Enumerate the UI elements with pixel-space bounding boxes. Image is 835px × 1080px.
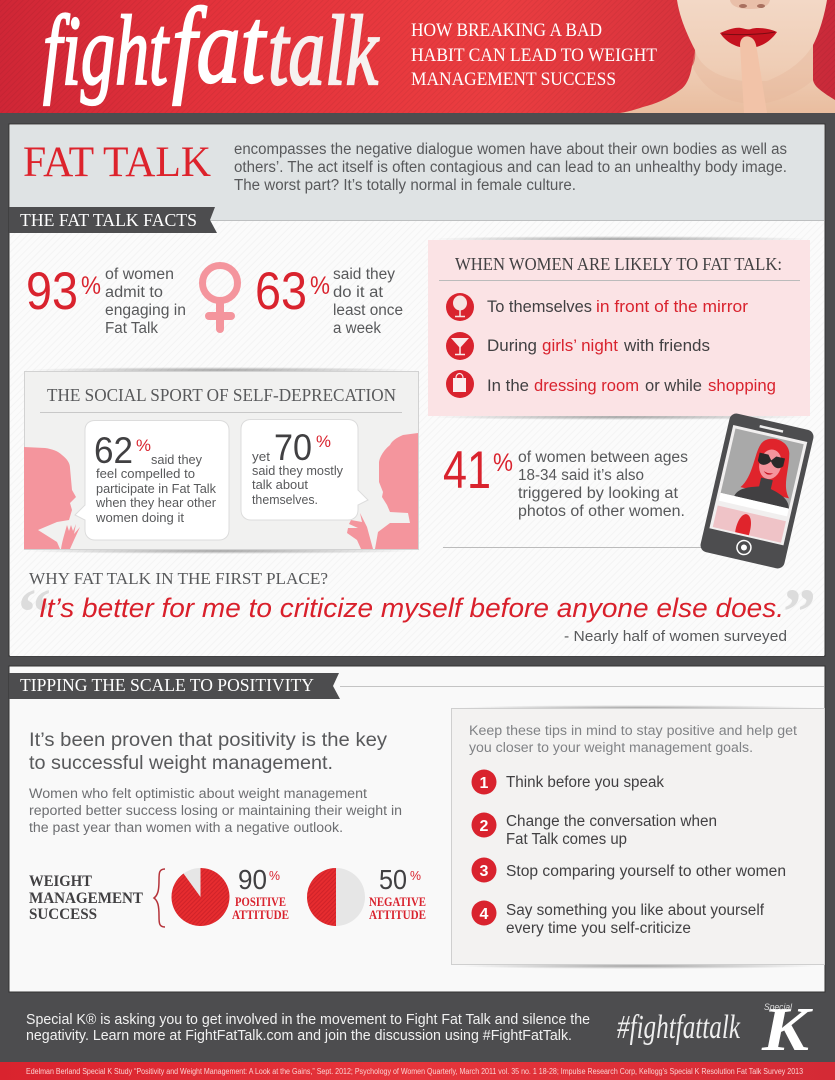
- tip 2: Fat Talk comes up: [506, 831, 627, 848]
- text block: definition: encompasses the negative dialogue women have about their own bodies as well as: [234, 141, 787, 158]
- stat: 41 percent: triggered by looking at: [518, 485, 679, 502]
- stat: 63 percent: least once: [333, 302, 403, 319]
- quote marks: ”: [783, 576, 816, 649]
- speech bubble: 62 percent: 62: [94, 430, 133, 471]
- stat: 41 percent: photos of other women.: [518, 503, 685, 520]
- item: girls night: girls’ night: [542, 337, 618, 355]
- heading: fat talk: FAT TALK: [23, 139, 211, 186]
- subheading: why fat talk: WHY FAT TALK IN THE FIRST PLACE?: [29, 569, 328, 588]
- quote marks: [18, 576, 816, 649]
- item: dressing room: In the: [487, 377, 529, 395]
- item: mirror: To themselves: [487, 298, 592, 316]
- stat: 90 percent positive attitude: ATTITUDE: [232, 908, 289, 922]
- item: girls night: with friends: [623, 337, 710, 355]
- item: mirror: [487, 298, 749, 316]
- speech bubble: 62 percent: feel compelled to: [96, 467, 195, 481]
- icon: cocktail glass: [446, 332, 474, 360]
- speech bubble: 70 percent: themselves.: [252, 493, 318, 507]
- speech bubble: 62 percent: women doing it: [95, 511, 185, 525]
- ribbon heading: TIPPING THE SCALE TO POSITIVITY: [20, 675, 314, 695]
- tagline: MANAGEMENT SUCCESS: [411, 70, 616, 90]
- label: weight management success: MANAGEMENT: [29, 890, 143, 907]
- tip 2: [472, 812, 717, 848]
- silhouette: right woman: [347, 433, 418, 549]
- chart: 50 percent pie: [307, 868, 365, 926]
- footer call to action: [26, 1012, 590, 1044]
- tip 4: Say something you like about yourself: [506, 902, 765, 919]
- tip 4: 4: [480, 906, 489, 923]
- item: dressing room: or while: [645, 377, 702, 395]
- panel heading: THE SOCIAL SPORT OF SELF-DEPRECATION: [47, 385, 396, 405]
- tip 4: [472, 900, 765, 937]
- tagline: HOW BREAKING A BAD: [411, 21, 602, 41]
- text block: optimism: reported better success losing or maintaining their weight in: [29, 803, 402, 818]
- tagline: [411, 21, 657, 90]
- item: dressing room: [487, 377, 776, 395]
- stat: 50 percent negative attitude: ATTITUDE: [369, 908, 426, 922]
- text block: definition: The worst part? It’s totally normal in female culture.: [234, 177, 576, 194]
- logo: fight fat talk: [43, 0, 379, 106]
- tip 1: Think before you speak: [506, 774, 664, 791]
- speech bubble: 62 percent: said they: [151, 453, 203, 467]
- tip 3: 3: [480, 863, 489, 880]
- stat: 63 percent: %: [310, 272, 330, 300]
- stat: 90 percent positive attitude: %: [269, 868, 280, 883]
- statement: It’s been proven that positivity is the key: [29, 729, 387, 751]
- ribbon heading: the fat talk facts: [9, 207, 217, 233]
- icon: shopping bag: [446, 370, 474, 398]
- item: mirror: in front of the mirror: [596, 298, 749, 316]
- panel: tips: [452, 708, 824, 964]
- speech bubble: 62 percent: when they hear other: [95, 496, 216, 510]
- speech bubble: 62 percent: %: [136, 436, 151, 455]
- item: dressing room: dressing room: [534, 377, 639, 395]
- tips intro: Keep these tips in mind to stay positive and help get: [469, 723, 797, 738]
- stat: 50 percent negative attitude: %: [410, 868, 421, 883]
- stat: 93 percent: [26, 262, 186, 337]
- silhouette: left woman: [24, 447, 80, 549]
- quote marks: “: [18, 576, 51, 649]
- item: dressing room: shopping: [708, 377, 776, 395]
- stat: 41 percent: %: [493, 449, 513, 477]
- stat: 50 percent negative attitude: [369, 864, 426, 922]
- tip 1: 1: [480, 775, 489, 792]
- icon: female symbol: [202, 266, 238, 329]
- text block: definition: others’. The act itself is often contagious and can lead to an unhealthy body image.: [234, 159, 787, 176]
- speech bubble: 70 percent: %: [316, 432, 331, 451]
- speech bubble: 62 percent: [75, 420, 229, 540]
- panel: when women are likely to fat talk: [428, 240, 810, 416]
- label: weight management success: SUCCESS: [29, 906, 97, 923]
- tip 2: 2: [480, 818, 489, 835]
- stat: 93 percent: 93: [26, 262, 78, 321]
- stat: 93 percent: Fat Talk: [105, 320, 158, 337]
- ribbon heading: the fat talk facts: THE FAT TALK FACTS: [20, 210, 197, 230]
- quote attribution: - Nearly half of women surveyed: [564, 628, 787, 645]
- logo: special k: K: [761, 996, 813, 1064]
- stat: 90 percent positive attitude: POSITIVE: [235, 895, 286, 909]
- stat: 63 percent: a week: [333, 320, 381, 337]
- stat: 41 percent: 18-34 said it’s also: [518, 467, 644, 484]
- photo: woman with finger on lips: [620, 0, 835, 113]
- logo: special k: Special: [764, 1002, 793, 1013]
- text block: optimism: [29, 786, 402, 835]
- speech bubble: 70 percent: said they mostly: [252, 464, 344, 478]
- tip 3: [472, 858, 786, 882]
- stat: 63 percent: said they: [333, 266, 395, 283]
- stat: 63 percent: [255, 262, 403, 337]
- stat: 50 percent negative attitude: 50: [379, 864, 407, 895]
- stat: 90 percent positive attitude: [232, 864, 289, 922]
- ribbon heading: [9, 673, 340, 699]
- icon: mirror: [446, 293, 474, 321]
- chart: 90 percent pie: [171, 868, 230, 926]
- statement: [29, 729, 387, 774]
- panel heading: WHEN WOMEN ARE LIKELY TO FAT TALK:: [455, 254, 782, 274]
- logo: hashtag fight fat talk: #fightfattalk: [617, 1009, 741, 1046]
- header banner: [0, 0, 835, 113]
- stat: 93 percent: admit to: [105, 284, 163, 301]
- text block: optimism: the past year than women with a negative outlook.: [29, 820, 343, 835]
- stat: 41 percent: of women between ages: [518, 449, 688, 466]
- tip 1: [472, 770, 664, 794]
- label: weight management success: [29, 873, 143, 923]
- stat: 41 percent: [443, 441, 705, 548]
- speech bubble: 70 percent: [241, 420, 368, 520]
- footer call to action: Special K® is asking you to get involved in the movement to Fight Fat Talk and silence the: [26, 1012, 590, 1028]
- label: weight management success: WEIGHT: [29, 873, 92, 890]
- icon: smartphone with photo: [699, 412, 815, 570]
- speech bubble: 70 percent: talk about: [252, 478, 309, 492]
- stat: 63 percent: 63: [255, 262, 307, 321]
- text block: optimism: Women who felt optimistic about weight management: [29, 786, 367, 801]
- tip 3: Stop comparing yourself to other women: [506, 863, 786, 880]
- stat: 63 percent: do it at: [333, 284, 384, 301]
- tip 2: Change the conversation when: [506, 813, 717, 830]
- footer call to action: negativity. Learn more at FightFatTalk.com and join the discussion using #FightFatTalk.: [26, 1028, 572, 1044]
- item: girls night: [487, 337, 710, 355]
- stat: 93 percent: %: [81, 272, 101, 300]
- panel: social sport of self-deprecation: [24, 372, 418, 550]
- tips intro: [469, 723, 797, 755]
- tip 4: every time you self-criticize: [506, 920, 691, 937]
- pull quote: It’s better for me to criticize myself before anyone else does.: [39, 593, 784, 623]
- tagline: HABIT CAN LEAD TO WEIGHT: [411, 46, 657, 66]
- tips intro: you closer to your weight management goals.: [469, 740, 753, 755]
- panel: tipping the scale to positivity: [9, 666, 825, 992]
- panel: fat talk facts: [9, 124, 825, 656]
- item: girls night: During: [487, 337, 537, 355]
- brace: [154, 869, 165, 927]
- speech bubble: 70 percent: yet: [252, 450, 271, 464]
- stat: 93 percent: engaging in: [105, 302, 186, 319]
- stat: 41 percent: 41: [443, 441, 491, 500]
- footer source bar: [0, 1062, 835, 1080]
- speech bubble: 62 percent: participate in Fat Talk: [96, 482, 217, 496]
- text block: definition: [234, 141, 787, 194]
- stat: 93 percent: of women: [105, 266, 174, 283]
- speech bubble: 70 percent: 70: [274, 427, 312, 468]
- stat: 50 percent negative attitude: NEGATIVE: [369, 895, 426, 909]
- statement: to successful weight management.: [29, 752, 333, 774]
- stat: 90 percent positive attitude: 90: [238, 864, 267, 895]
